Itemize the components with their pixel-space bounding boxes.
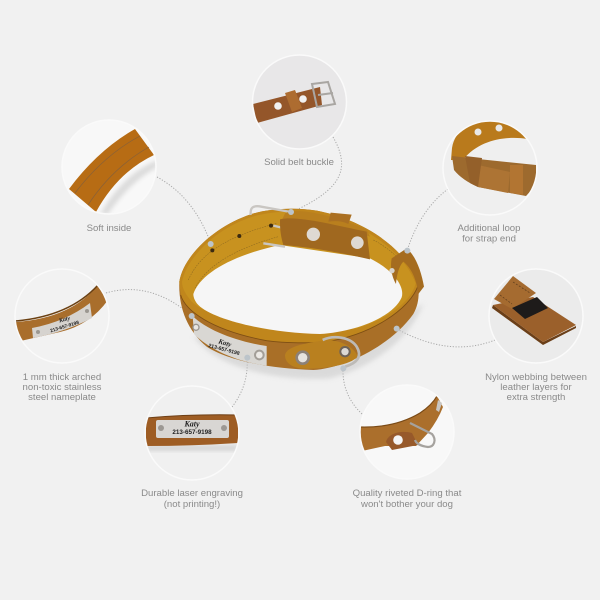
holes <box>237 234 241 238</box>
circle: nylon webbing <box>489 269 583 363</box>
circle: additional loop <box>443 120 537 215</box>
label: additional loop <box>458 223 520 244</box>
circle: laser engraving: 213-657-9198 <box>172 429 212 436</box>
label: D-ring: won't bother your dog <box>360 499 453 510</box>
collar shadow <box>193 303 423 379</box>
label: nylon webbing: Nylon webbing between <box>485 372 587 383</box>
label: additional loop: for strap end <box>462 234 516 244</box>
circle: belt buckle <box>252 55 346 149</box>
callout dots <box>189 209 410 371</box>
label: additional loop: Additional loop <box>458 223 520 234</box>
label: nameplate: non-toxic stainless <box>23 382 102 393</box>
circle: nameplate: 213-657-9198 <box>50 320 80 334</box>
label: soft inside: Soft inside <box>87 223 131 234</box>
rim and lining layer <box>179 209 418 343</box>
label: nameplate: 1 mm thick arched <box>23 372 101 383</box>
label: D-ring <box>353 488 462 510</box>
nameplate: Katy <box>216 337 233 349</box>
label: nylon webbing <box>485 372 587 403</box>
outer leather silhouette <box>179 209 419 370</box>
strap tab upper rim <box>282 211 370 237</box>
buckle <box>251 206 291 247</box>
main collar photo <box>179 206 424 379</box>
label: nylon webbing: leather layers for <box>500 382 573 393</box>
D-ring <box>323 337 359 367</box>
nameplate: 213-657-9198 <box>208 343 240 357</box>
circle: nameplate <box>15 269 109 363</box>
circle: nameplate: Katy <box>58 316 71 325</box>
circle: laser engraving: Katy <box>183 420 200 428</box>
stitching on lining <box>188 223 398 288</box>
nameplate <box>192 316 267 366</box>
dotted connector lines <box>106 137 495 414</box>
circle: soft inside <box>62 120 158 214</box>
yellow lining face <box>182 212 416 330</box>
rim dark line <box>181 285 418 343</box>
upper keeper <box>328 213 352 224</box>
label: nylon webbing: extra strength <box>507 392 565 403</box>
right side loop <box>391 248 424 294</box>
circle: laser engraving <box>145 386 239 480</box>
strap end with rivets <box>280 218 370 259</box>
label: nameplate <box>23 372 102 403</box>
label: laser engraving: (not printing!) <box>164 499 220 510</box>
label: nameplate: steel nameplate <box>28 392 96 403</box>
label: D-ring: Quality riveted D-ring that <box>353 488 462 499</box>
centre opening <box>193 245 402 334</box>
label: laser engraving: Durable laser engraving <box>141 488 243 499</box>
circle: D-ring <box>360 385 454 479</box>
leather tab with rivets <box>285 340 357 369</box>
label: laser engraving <box>141 488 243 510</box>
label: belt buckle: Solid belt buckle <box>264 157 334 168</box>
